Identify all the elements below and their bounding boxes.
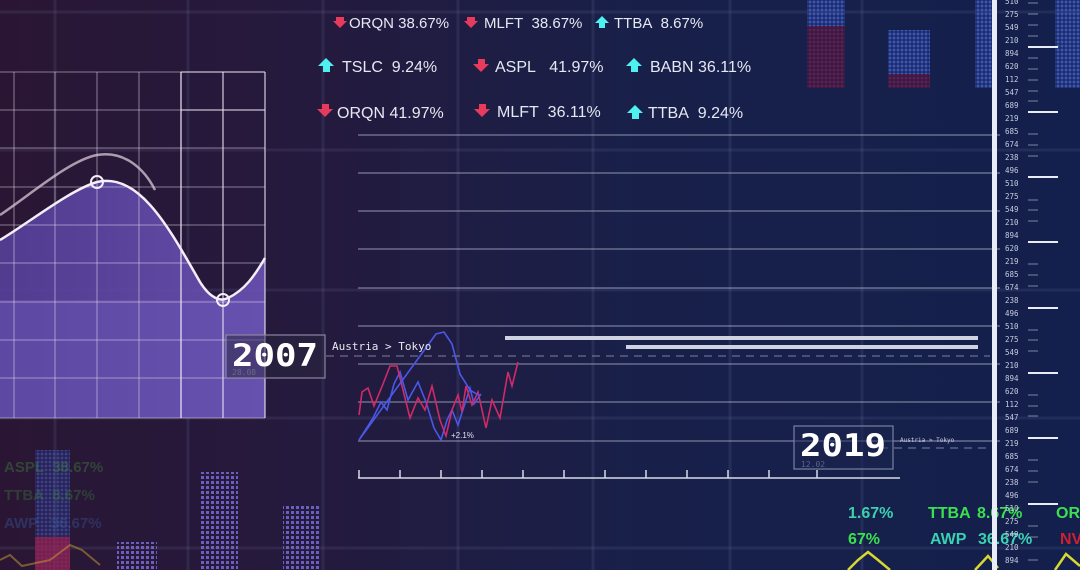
right scale numbers: 496 <box>1005 309 1019 318</box>
right scale numbers: 275 <box>1005 335 1019 344</box>
right scale numbers: 112 <box>1005 75 1019 84</box>
right scale numbers: 210 <box>1005 543 1019 552</box>
right scale numbers: 275 <box>1005 10 1019 19</box>
right scale numbers: 275 <box>1005 517 1019 526</box>
bottom-left dot bars: TTBA 8.67% <box>4 487 95 504</box>
horizontal lines chart area <box>358 135 1000 441</box>
right scale numbers: 689 <box>1005 101 1019 110</box>
year box 2019: 12.02 <box>801 460 825 469</box>
right scale numbers: 547 <box>1005 413 1019 422</box>
year box 2007 <box>226 335 325 378</box>
right scale numbers: 674 <box>1005 283 1019 292</box>
text: Austria > Tokyo <box>900 437 955 444</box>
right scale numbers: 894 <box>1005 556 1019 565</box>
right scale numbers: 689 <box>1005 426 1019 435</box>
progress bars <box>505 336 978 349</box>
axis ticks <box>358 470 900 478</box>
right scale numbers: 219 <box>1005 114 1019 123</box>
right scale numbers: 549 <box>1005 23 1019 32</box>
right scale numbers: 112 <box>1005 400 1019 409</box>
year box 2019 <box>794 426 893 469</box>
right scale numbers: 496 <box>1005 491 1019 500</box>
ticker list: ORQN 38.67% <box>349 15 449 32</box>
right scale numbers: 510 <box>1005 322 1019 331</box>
right scale numbers: 549 <box>1005 530 1019 539</box>
right scale numbers: 549 <box>1005 348 1019 357</box>
label Austria > Tokyo: Austria > Tokyo <box>332 340 431 353</box>
right scale numbers: 674 <box>1005 140 1019 149</box>
right scale ticks <box>1028 3 1058 560</box>
right scale numbers: 210 <box>1005 218 1019 227</box>
ticker list: TTBA 8.67% <box>614 15 703 32</box>
bottom-right green tickers: OR <box>1056 505 1080 522</box>
ticker list: TSLC 9.24% <box>342 59 437 76</box>
right scale numbers: 510 <box>1005 504 1019 513</box>
ticker list: TTBA 9.24% <box>648 105 743 122</box>
ticker list: ASPL 41.97% <box>495 59 604 76</box>
bottom-right green tickers: 8.67% <box>977 505 1022 522</box>
top bars <box>807 0 1080 88</box>
ticker list: ORQN 41.97% <box>337 105 444 122</box>
right scale numbers: 549 <box>1005 205 1019 214</box>
right scale numbers: 496 <box>1005 166 1019 175</box>
year box 2007: 2007 <box>232 338 318 374</box>
bottom-left dot bars: AWP 36.67% <box>4 515 102 532</box>
right scale numbers: 210 <box>1005 361 1019 370</box>
ticker list <box>317 15 751 122</box>
bottom-right green tickers: AWP <box>930 531 967 548</box>
right scale numbers: 238 <box>1005 153 1019 162</box>
right scale numbers: 275 <box>1005 192 1019 201</box>
right scale numbers: 510 <box>1005 179 1019 188</box>
right scale numbers: 685 <box>1005 270 1019 279</box>
right scale numbers: 685 <box>1005 452 1019 461</box>
bottom-right green tickers: 67% <box>848 531 880 548</box>
right scale numbers: 674 <box>1005 465 1019 474</box>
vertical divider <box>992 0 997 570</box>
right scale numbers <box>1005 0 1019 565</box>
right scale numbers: 547 <box>1005 88 1019 97</box>
panel: wave area chart <box>0 72 265 418</box>
bottom-right green tickers: 36.67% <box>978 531 1032 548</box>
right scale numbers: 685 <box>1005 127 1019 136</box>
year box 2019: 2019 <box>800 428 886 464</box>
right scale numbers: 210 <box>1005 36 1019 45</box>
right scale numbers: 620 <box>1005 387 1019 396</box>
bottom-left dot bars: ASPL 38.67% <box>4 459 103 476</box>
ticker list: MLFT 38.67% <box>484 15 582 32</box>
right scale numbers: 219 <box>1005 257 1019 266</box>
right scale numbers: 894 <box>1005 49 1019 58</box>
bottom-right green tickers <box>848 505 1080 570</box>
bottom-left dot bars <box>0 450 319 570</box>
right scale numbers: 894 <box>1005 231 1019 240</box>
bottom-right green tickers: 1.67% <box>848 505 893 522</box>
right scale numbers: 620 <box>1005 62 1019 71</box>
bottom-right green tickers: TTBA <box>928 505 971 522</box>
ticker list: BABN 36.11% <box>650 59 751 76</box>
right scale numbers: 238 <box>1005 478 1019 487</box>
line chart: red and blue <box>359 332 518 440</box>
ticker list: MLFT 36.11% <box>497 104 601 121</box>
label: +2.1%: +2.1% <box>451 431 474 440</box>
right scale numbers: 620 <box>1005 244 1019 253</box>
right scale numbers: 238 <box>1005 296 1019 305</box>
year box 2007: 28.08 <box>232 368 256 377</box>
right scale numbers: 219 <box>1005 439 1019 448</box>
right scale numbers: 894 <box>1005 374 1019 383</box>
